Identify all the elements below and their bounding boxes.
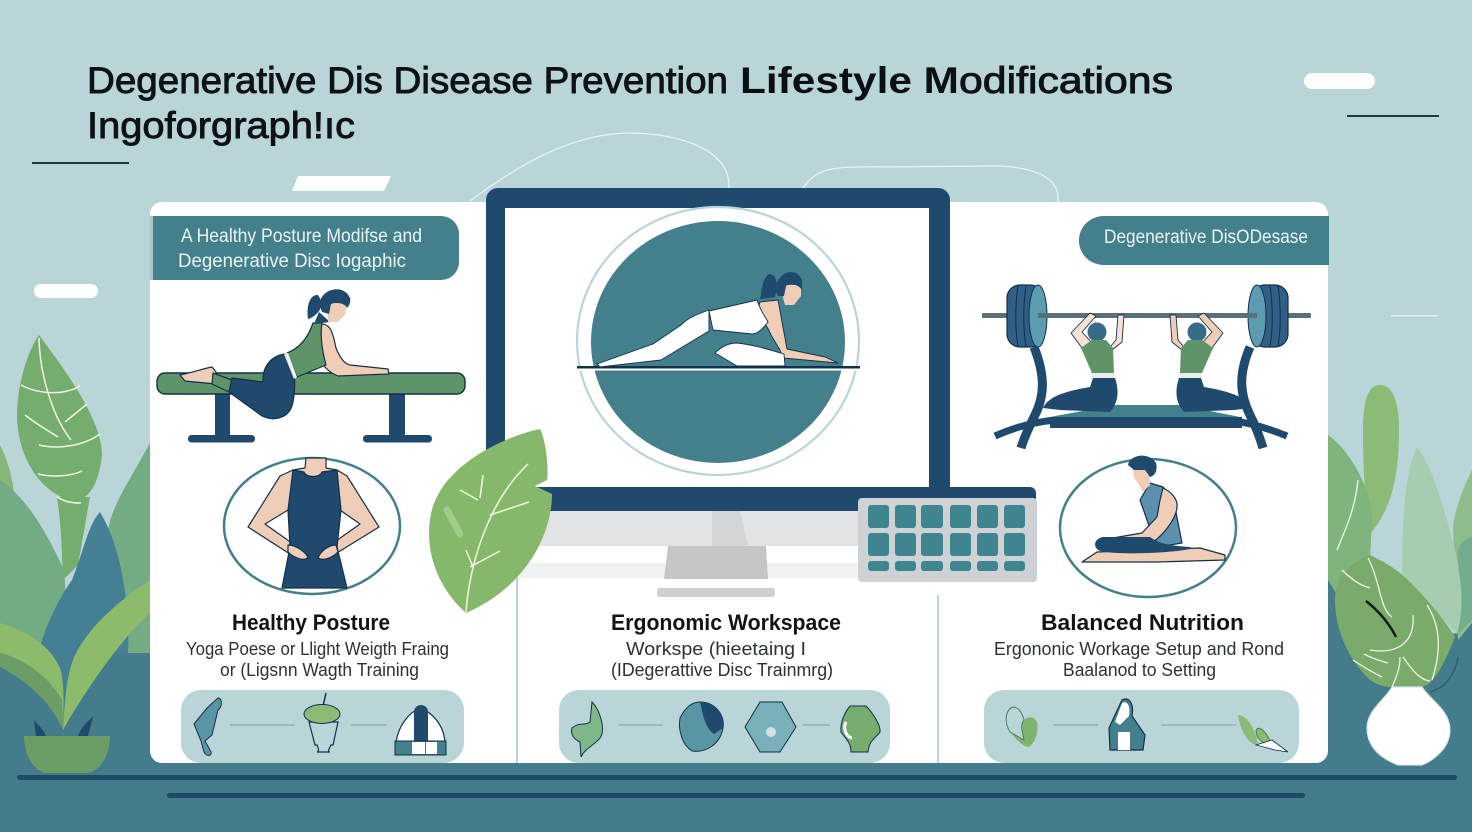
illustration: woman stretching on bench — [157, 289, 465, 442]
column text: Healthy Posture: Yoga Poese or Llight Weigth Fraing — [186, 638, 449, 659]
figure left — [1043, 313, 1124, 412]
left tab — [150, 216, 459, 280]
right tab — [1079, 216, 1329, 265]
column text: Ergonomic Workspace: Ergonomic Workspace — [611, 610, 841, 635]
main white panel — [150, 202, 1328, 763]
left tab: Degenerative Disc Iogaphic — [178, 251, 406, 272]
illustration: posture torso in ellipse — [224, 458, 400, 594]
icon strip: middle — [559, 690, 890, 763]
column text: Balanced Nutrition: Balanced Nutrition — [1041, 610, 1244, 635]
column text: Balanced Nutrition — [994, 610, 1284, 680]
title: Degenerative Dis Disease Prevention — [87, 59, 728, 101]
icon: green hand — [572, 702, 602, 757]
icon: leaves and towel — [1238, 715, 1288, 752]
icon: hooded coat — [1109, 699, 1145, 750]
icon: jacket — [395, 705, 446, 755]
plank figure — [597, 272, 838, 367]
column text: Ergonomic Workspace — [611, 610, 841, 680]
illustration: keyboard — [858, 487, 1037, 582]
vase — [1367, 687, 1450, 765]
icon: bottle — [194, 698, 221, 755]
icon: leaf cluster — [1006, 707, 1038, 747]
illustration: seated figure in ellipse — [1060, 456, 1236, 597]
column text: Balanced Nutrition: Ergononic Workage Setup and Rond — [994, 638, 1284, 659]
column text: Healthy Posture: Healthy Posture — [232, 610, 390, 635]
column text: Ergonomic Workspace: Workspe (hieetaing I — [626, 638, 806, 659]
illustration: monitor — [486, 188, 1036, 597]
title: odifications — [959, 59, 1173, 101]
left tab: A Healthy Posture Modifse and — [181, 226, 422, 247]
title: Ingoforgraph!ıc — [87, 104, 355, 146]
icon: green cup — [304, 693, 340, 752]
icon strip: right — [984, 690, 1299, 763]
plants: left — [0, 335, 150, 773]
column text: Healthy Posture: or (Ligsnn Wagth Training — [220, 659, 419, 680]
icon: green vest — [841, 706, 880, 752]
title — [87, 59, 1173, 146]
figure right — [1170, 313, 1251, 412]
icon: teal hexagon — [745, 702, 796, 752]
decorative pills and rules — [32, 73, 1439, 316]
column text: Balanced Nutrition: Baalanod to Setting — [1063, 659, 1216, 680]
column text: Healthy Posture — [186, 610, 449, 680]
icon: large leaf — [429, 429, 552, 613]
title: Lifestyle M — [740, 59, 959, 101]
plants: right — [1328, 385, 1472, 765]
icon strip: left — [181, 690, 464, 763]
column text: Ergonomic Workspace: (IDegerattive Disc Trainmrg) — [611, 659, 833, 680]
illustration: barbell with two figures — [982, 285, 1311, 448]
floor bars — [17, 775, 1457, 798]
icon: round head — [680, 702, 723, 751]
right tab: Degenerative DisODesase — [1104, 227, 1308, 248]
